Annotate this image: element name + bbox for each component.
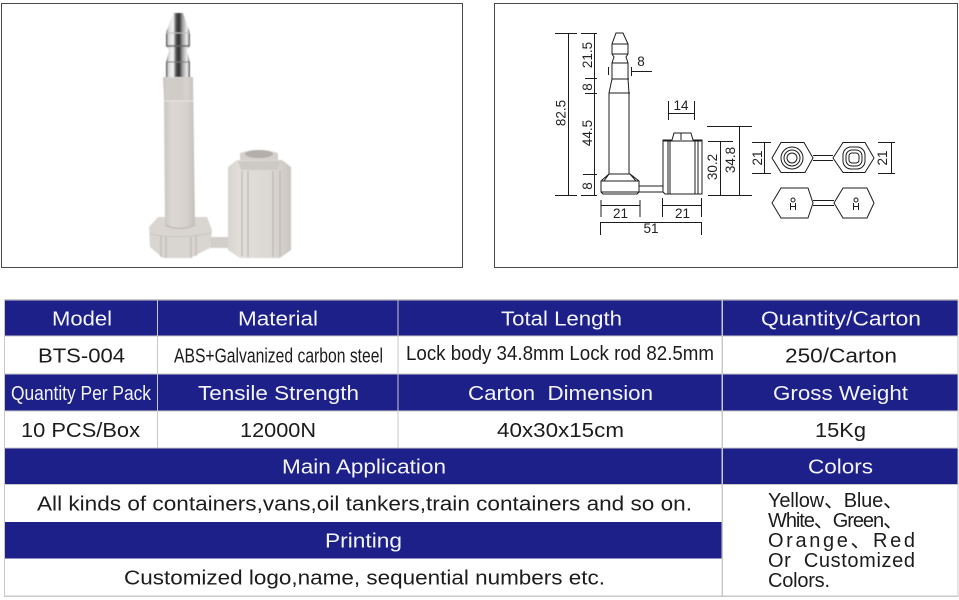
cell: colors list xyxy=(723,485,958,596)
row: header 2: Gross Weight xyxy=(773,383,908,405)
dimension: pin width 8: 8 xyxy=(637,54,645,69)
row: values 1: BTS-004 xyxy=(38,346,125,368)
row: header 1: Quantity/Carton xyxy=(761,308,921,330)
dimension: pin segments 21.5 8 44.5 8: 21.5 xyxy=(580,42,595,68)
row: header 1: Total Length xyxy=(501,308,622,330)
specification table xyxy=(4,299,958,597)
dimension: hex widths 21 21: 21 xyxy=(875,150,890,166)
dimension: pin segments 21.5 8 44.5 8: 8 xyxy=(580,182,595,190)
dimension: lock width 14 xyxy=(668,98,695,120)
row: application text: All kinds of containers,vans,oil tankers,train containers and so on. xyxy=(37,494,692,516)
dimension: base widths 21 21 51: 21 xyxy=(675,206,690,221)
cell: colors list: White、Green、 xyxy=(768,510,903,532)
row: values 1: Lock body 34.8mm Lock rod 82.5mm xyxy=(406,343,714,365)
row: header 1: Model xyxy=(52,308,112,330)
drawing: top view xyxy=(772,142,874,172)
dimension: lock width 14: 14 xyxy=(673,98,689,113)
row: header 1 xyxy=(5,300,958,336)
row: header 2: Carton Dimension xyxy=(468,383,653,405)
dimension: pin segments 21.5 8 44.5 8 xyxy=(580,33,597,196)
row: values 2 xyxy=(5,412,958,448)
dimension: overall height 82.5 xyxy=(554,33,577,196)
panel: product photo xyxy=(2,4,462,268)
dimension: base widths 21 21 51: 21 xyxy=(613,206,628,221)
dimension: pin segments 21.5 8 44.5 8: 44.5 xyxy=(580,120,595,146)
dimension: lock heights 30.2 34.8: 30.2 xyxy=(705,154,720,180)
dimension: lock heights 30.2 34.8 xyxy=(705,126,752,196)
row: values 2: 15Kg xyxy=(815,420,866,442)
row: main application and colors headers: Colors xyxy=(808,456,873,478)
row: header 1: Material xyxy=(238,308,318,330)
row: values 2: 10 PCS/Box xyxy=(21,420,140,442)
row: printing text xyxy=(5,558,722,596)
drawing: bottom view xyxy=(772,188,874,218)
dimension: pin width 8 xyxy=(608,54,652,76)
product photo: bolt seal pin xyxy=(149,13,212,258)
row: values 2: 12000N xyxy=(240,420,316,442)
product photo: bolt seal lock body xyxy=(210,150,291,258)
panel: technical drawing xyxy=(494,4,958,268)
dimension: overall height 82.5: 82.5 xyxy=(554,100,568,126)
row: header 2: Tensile Strength xyxy=(198,383,359,405)
row: printing header: Printing xyxy=(325,530,402,552)
dimension: pin segments 21.5 8 44.5 8: 8 xyxy=(580,83,595,91)
row: main application and colors headers xyxy=(5,448,958,484)
cell: colors list: Colors. xyxy=(768,570,830,592)
row: header 2: Quantity Per Pack xyxy=(11,383,152,405)
row: printing text: Customized logo,name, sequential numbers etc. xyxy=(124,568,605,590)
row: values 1: ABS+Galvanized carbon steel xyxy=(174,346,383,368)
dimension: hex widths 21 21 xyxy=(750,142,895,174)
cell: colors list: Or Customized xyxy=(768,550,915,572)
dimension: hex widths 21 21: 21 xyxy=(750,150,765,166)
dimension: lock heights 30.2 34.8: 34.8 xyxy=(723,147,738,173)
row: main application and colors headers: Main Application xyxy=(282,456,446,478)
row: application text xyxy=(5,485,722,522)
row: header 2 xyxy=(5,374,958,410)
cell: colors list: Orange、Red xyxy=(768,530,915,552)
dimension: base widths 21 21 51 xyxy=(600,198,702,236)
row: printing header xyxy=(5,522,722,558)
cell: colors list: Yellow、Blue、 xyxy=(768,490,903,512)
row: values 1: 250/Carton xyxy=(785,346,897,368)
row: values 2: 40x30x15cm xyxy=(497,420,624,442)
row: values 1 xyxy=(5,336,958,374)
dimension: base widths 21 21 51: 51 xyxy=(643,221,659,236)
drawing: side view of pin and lock body xyxy=(601,33,702,194)
